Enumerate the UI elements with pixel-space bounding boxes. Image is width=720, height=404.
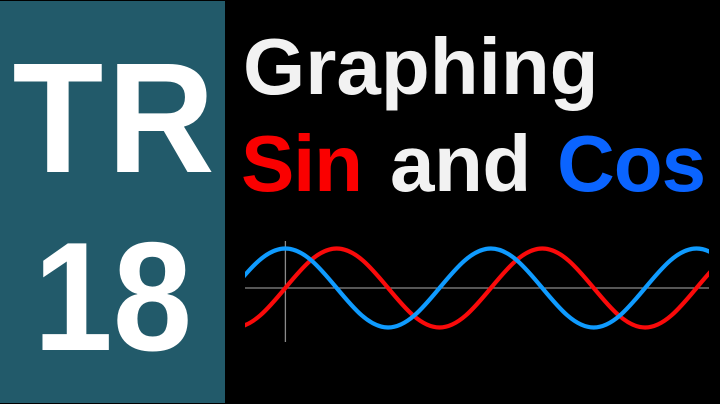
title line 1: Graphing: Graphing — [243, 22, 599, 111]
title line 2: Sin and Cos — [241, 119, 705, 208]
title line 2: Sin and Cos: Sin — [241, 119, 362, 208]
sidebar number: 18: 18 — [34, 209, 192, 383]
title line 2: Sin and Cos: Cos — [557, 119, 705, 208]
cosine curve — [234, 248, 720, 328]
chart: sine and cosine waves — [234, 241, 720, 342]
panel: teal sidebar — [0, 1, 225, 403]
title line 2: Sin and Cos: and — [390, 119, 531, 208]
y axis — [284, 241, 286, 342]
sine curve — [234, 248, 720, 328]
title — [241, 22, 705, 208]
x axis — [245, 287, 709, 289]
sidebar label: TR: TR — [12, 31, 219, 206]
